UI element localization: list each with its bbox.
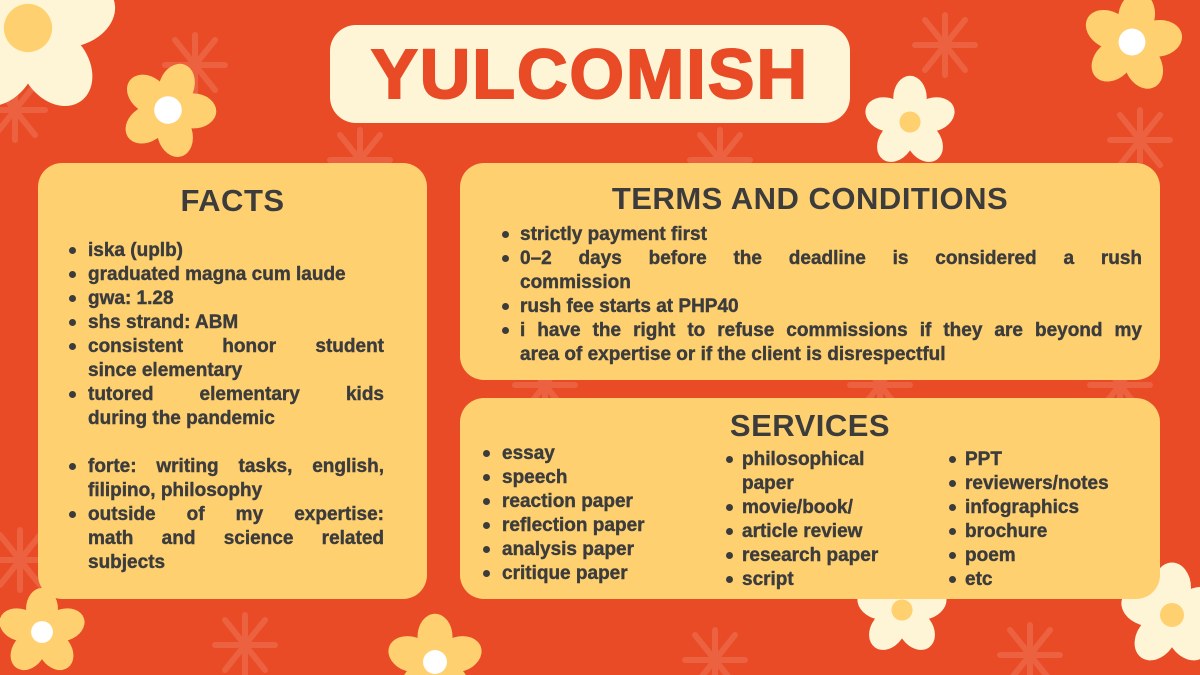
terms list: i have the right to refuse commissions if they are beyond my xyxy=(520,320,1142,341)
services column 2: script xyxy=(742,569,794,590)
services column 1: analysis paper xyxy=(502,539,634,560)
panel: terms and conditions xyxy=(460,163,1160,380)
services column 3: reviewers/notes xyxy=(965,473,1109,494)
facts list: tutored elementary kids xyxy=(88,384,384,405)
title xyxy=(330,25,850,123)
services column 3: PPT xyxy=(965,449,1002,470)
heading: services: SERVICES xyxy=(730,408,890,443)
panel: services xyxy=(460,398,1160,599)
facts list: gwa: 1.28 xyxy=(88,288,174,309)
services column 1: reaction paper xyxy=(502,491,633,512)
panel: facts xyxy=(38,163,427,599)
facts list xyxy=(69,240,384,573)
facts list: consistent honor student xyxy=(88,336,384,357)
heading: facts: FACTS xyxy=(180,183,285,218)
facts list: filipino, philosophy xyxy=(88,480,262,501)
terms list xyxy=(502,224,1142,365)
services column 1: speech xyxy=(502,467,567,488)
facts list: outside of my expertise: xyxy=(88,504,384,525)
facts list: since elementary xyxy=(88,360,242,381)
facts list: math and science related xyxy=(88,528,384,549)
services column 3: poem xyxy=(965,545,1016,566)
facts list: graduated magna cum laude xyxy=(88,264,346,285)
services column 1: essay xyxy=(502,443,555,464)
facts list: iska (uplb) xyxy=(88,240,183,261)
services column 2: article review xyxy=(742,521,862,542)
title: YULCOMISH xyxy=(371,35,809,113)
terms list: rush fee starts at PHP40 xyxy=(520,296,739,317)
facts list: during the pandemic xyxy=(88,408,275,429)
terms list: commission xyxy=(520,272,631,293)
services column 1: reflection paper xyxy=(502,515,645,536)
services column 2: movie/book/ xyxy=(742,497,853,518)
services column 3: brochure xyxy=(965,521,1047,542)
facts list: subjects xyxy=(88,552,165,573)
services column 3: etc xyxy=(965,569,992,590)
terms list: area of expertise or if the client is disrespectful xyxy=(520,344,946,365)
services column 1 xyxy=(483,443,645,584)
flowers xyxy=(0,0,124,120)
services column 3 xyxy=(949,449,1109,590)
services column 1: critique paper xyxy=(502,563,628,584)
facts list: forte: writing tasks, english, xyxy=(88,456,384,477)
services column 2: research paper xyxy=(742,545,878,566)
services column 3: infographics xyxy=(965,497,1079,518)
terms list: strictly payment first xyxy=(520,224,707,245)
services column 2 xyxy=(726,449,878,590)
facts list: shs strand: ABM xyxy=(88,312,238,333)
services column 2: paper xyxy=(742,473,794,494)
services column 2: philosophical xyxy=(742,449,864,470)
terms list: 0–2 days before the deadline is considered a rush xyxy=(520,248,1142,269)
heading: terms: TERMS AND CONDITIONS xyxy=(612,181,1008,216)
